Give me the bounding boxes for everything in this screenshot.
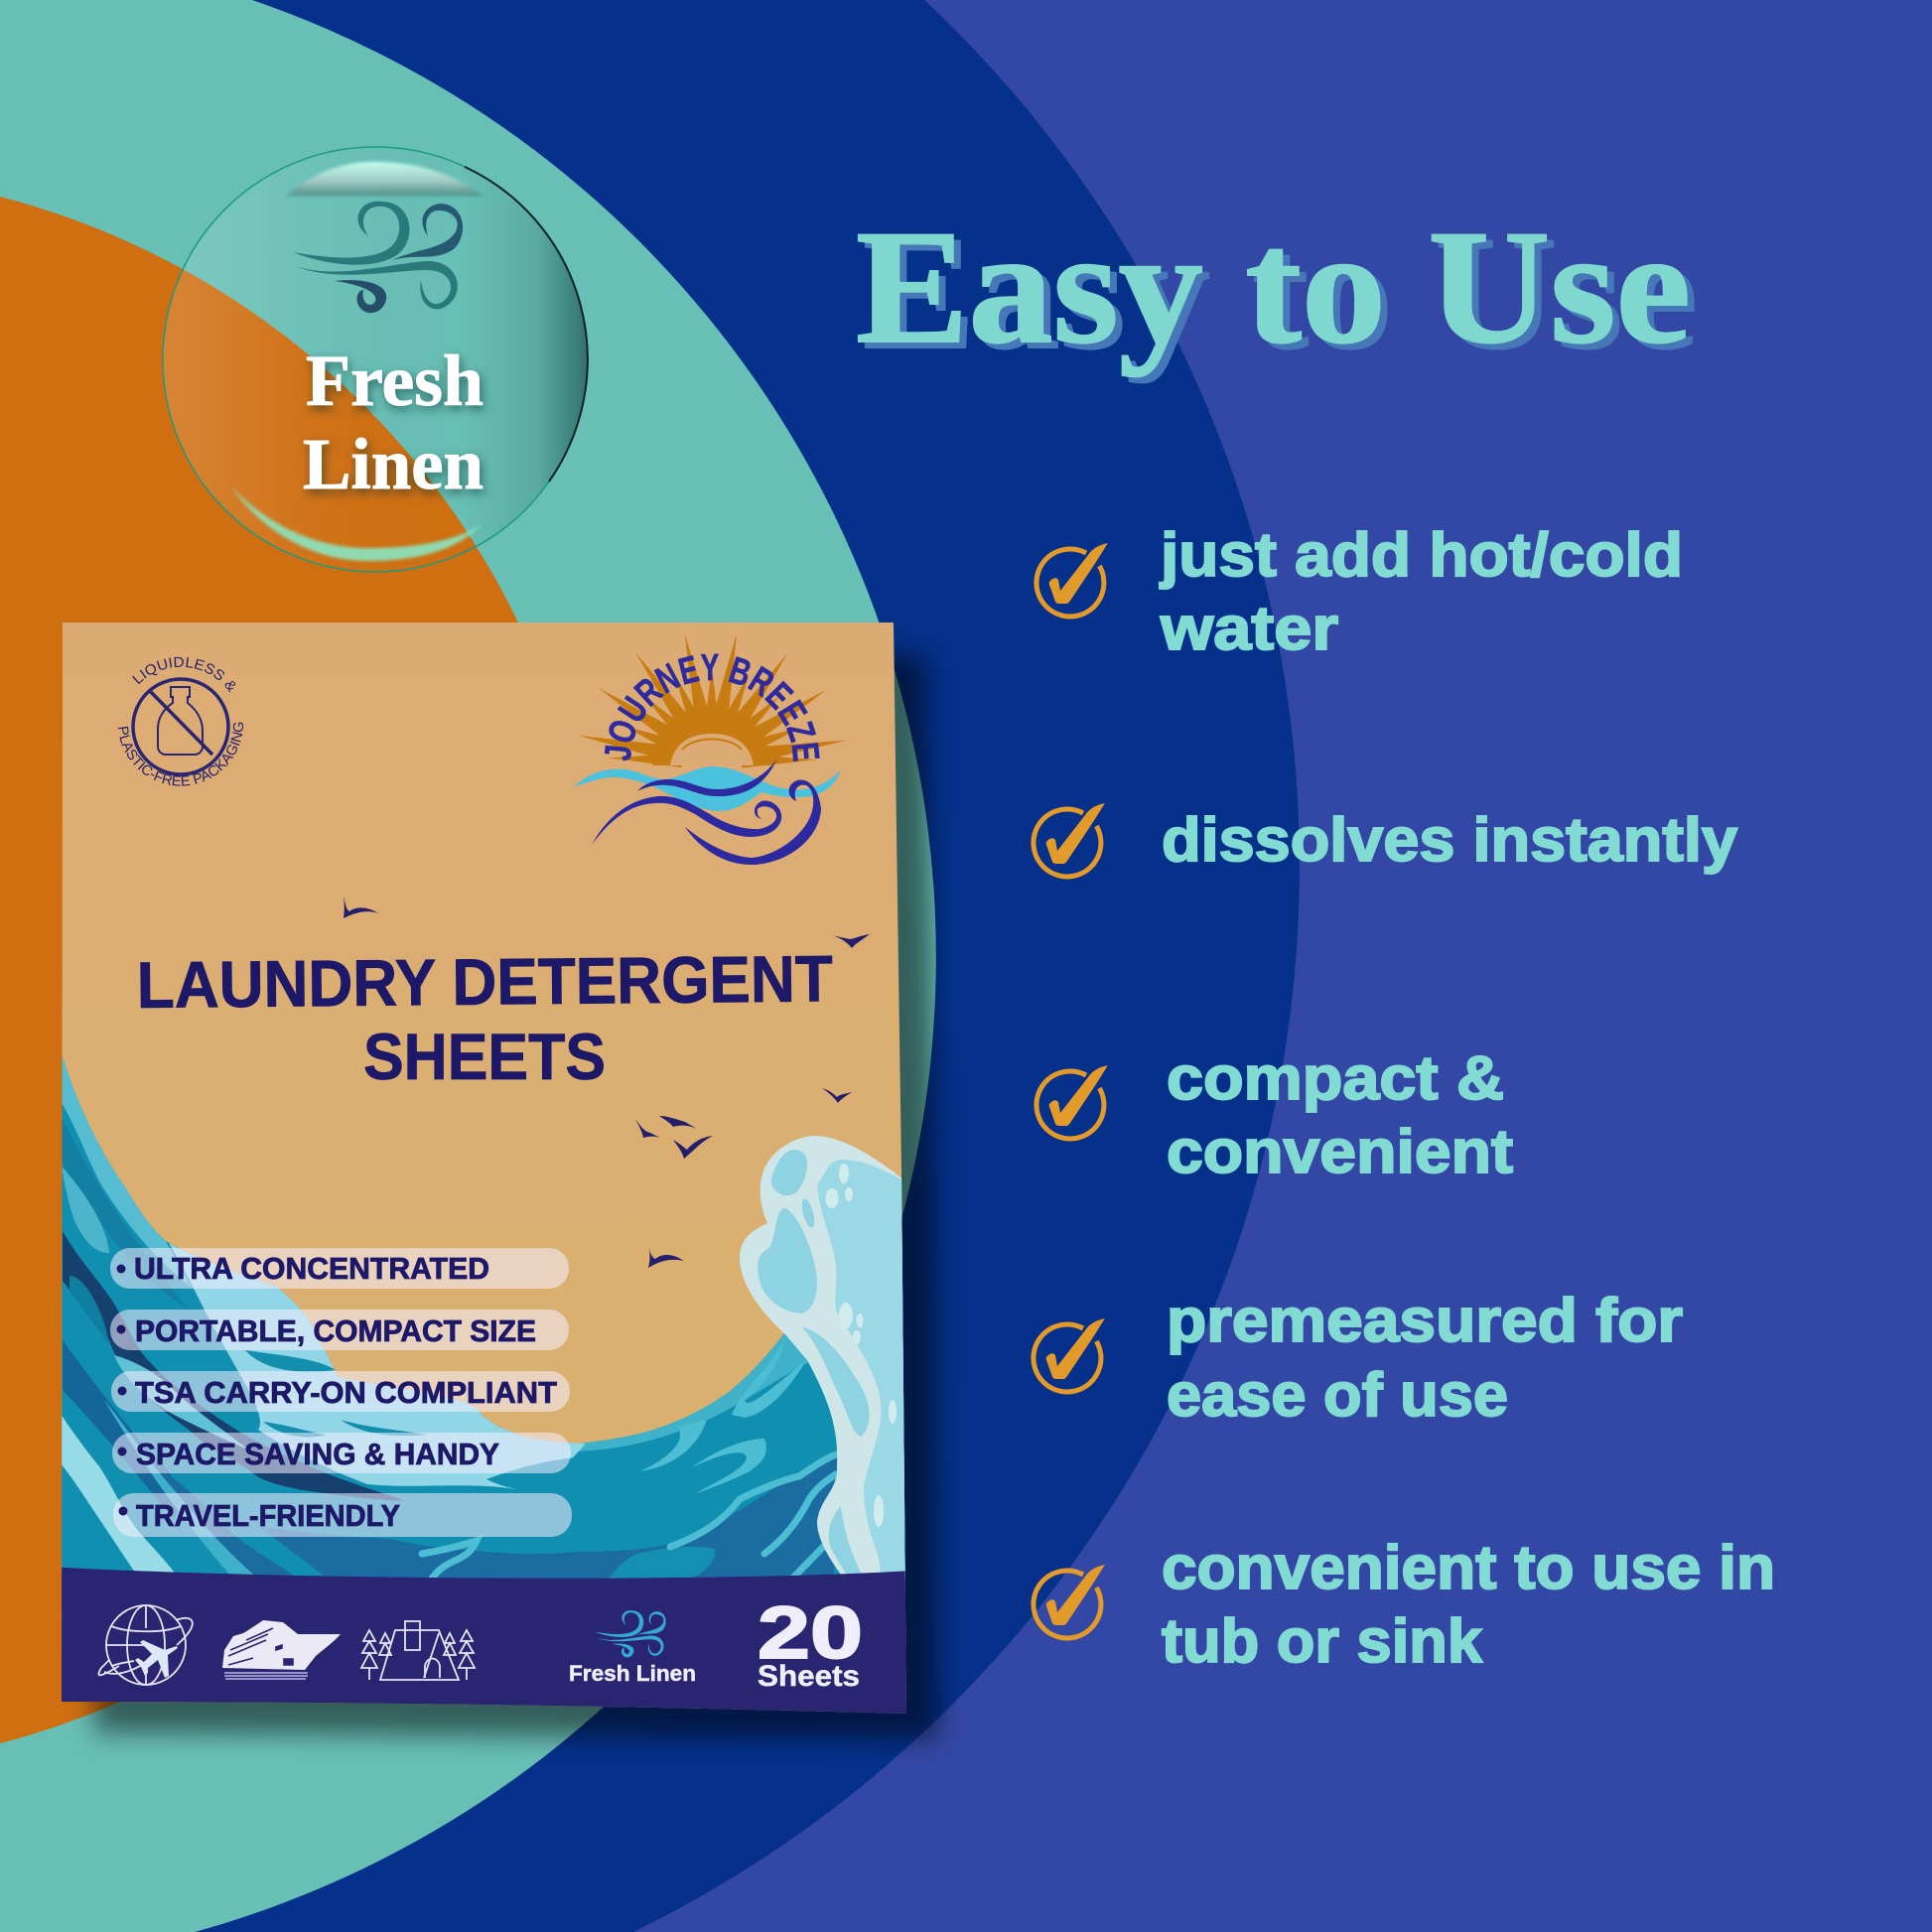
badge: liquidless plastic-free [118, 657, 244, 786]
benefit 2: dissolves instantly [1162, 806, 1738, 875]
feature pills [110, 1248, 572, 1537]
bubble label: Fresh [306, 341, 483, 421]
glass bubble: Fresh Linen [163, 147, 588, 572]
check icon [1034, 1318, 1105, 1392]
sheet count: Sheets [758, 1660, 860, 1693]
top highlight [285, 162, 486, 199]
benefit 4 [1034, 1287, 1683, 1430]
benefit 3: convenient [1167, 1118, 1513, 1186]
feature pills: TSA CARRY-ON COMPLIANT [135, 1376, 557, 1410]
pack background [50, 616, 923, 1727]
product name: LAUNDRY DETERGENT [136, 941, 833, 1022]
benefit 4: ease of use [1167, 1361, 1508, 1430]
pack shadow [89, 655, 938, 1739]
benefit 1 [1036, 521, 1683, 663]
logo swirls [592, 759, 821, 865]
bubble label: Linen [303, 424, 483, 504]
feature pills: TRAVEL-FRIENDLY [136, 1499, 400, 1533]
bubble label [303, 341, 483, 504]
logo name: JOURNEY BREEZE [604, 653, 820, 761]
check icon [1034, 803, 1105, 877]
benefit 1: just add hot/cold [1160, 521, 1683, 590]
foam crest [740, 1136, 908, 1579]
icon: A-frame cabin and trees [361, 1621, 475, 1680]
sun rays [578, 631, 848, 767]
product name [136, 941, 833, 1093]
pale lower-left streak [62, 1416, 175, 1573]
bottom navy band [62, 1567, 906, 1714]
sheet count [758, 1591, 863, 1693]
benefit 3: compact & [1167, 1044, 1504, 1113]
benefit 4: premeasured for [1167, 1287, 1683, 1355]
upper edge band [569, 1333, 809, 1451]
birds [344, 896, 870, 1268]
product pack [62, 622, 906, 1714]
feature pills: SPACE SAVING & HANDY [136, 1438, 499, 1471]
icon: wind swirl [293, 202, 463, 313]
check icon [1036, 1065, 1108, 1139]
feature pills: PORTABLE, COMPACT SIZE [135, 1314, 536, 1348]
left cyan strip [62, 1055, 192, 1288]
title: Easy to Use [856, 198, 1691, 377]
check icon [1034, 1565, 1105, 1638]
bottom dark water [258, 1457, 837, 1579]
logo wave [574, 766, 841, 811]
badge: liquidless plastic-free: PLASTIC-FREE PACKAGING [118, 723, 244, 786]
benefit 5: tub or sink [1162, 1607, 1483, 1676]
scent label: Fresh Linen [569, 1661, 696, 1686]
icon: globe with plane [98, 1605, 193, 1685]
check icon [1036, 543, 1108, 617]
feature pills: ULTRA CONCENTRATED [134, 1252, 489, 1286]
badge: liquidless plastic-free: LIQUIDLESS & [132, 657, 235, 693]
bottom highlight [231, 486, 483, 561]
icon: cruise ship [222, 1620, 341, 1679]
wave illustration [50, 1033, 913, 1608]
sheet count: 20 [758, 1591, 863, 1674]
benefit 5 [1034, 1534, 1775, 1676]
dark navy band [63, 1231, 405, 1501]
left dark blobs [63, 1340, 179, 1519]
benefit 3 [1036, 1044, 1513, 1186]
benefit 5: convenient to use in [1162, 1534, 1775, 1602]
product name: SHEETS [363, 1020, 606, 1093]
cyan swash [114, 1355, 248, 1449]
orange circle [0, 197, 598, 1743]
benefit 1: water [1160, 595, 1338, 663]
teal notches in the lip [245, 1350, 336, 1372]
right streaks [640, 1340, 806, 1494]
icon: fresh linen wind [595, 1610, 666, 1657]
teal circle [0, 0, 936, 1932]
pale wave lip [169, 1243, 586, 1489]
foam inner [817, 1160, 908, 1579]
logo: Journey Breeze [574, 633, 846, 865]
dark blue circle [0, 0, 1300, 1932]
